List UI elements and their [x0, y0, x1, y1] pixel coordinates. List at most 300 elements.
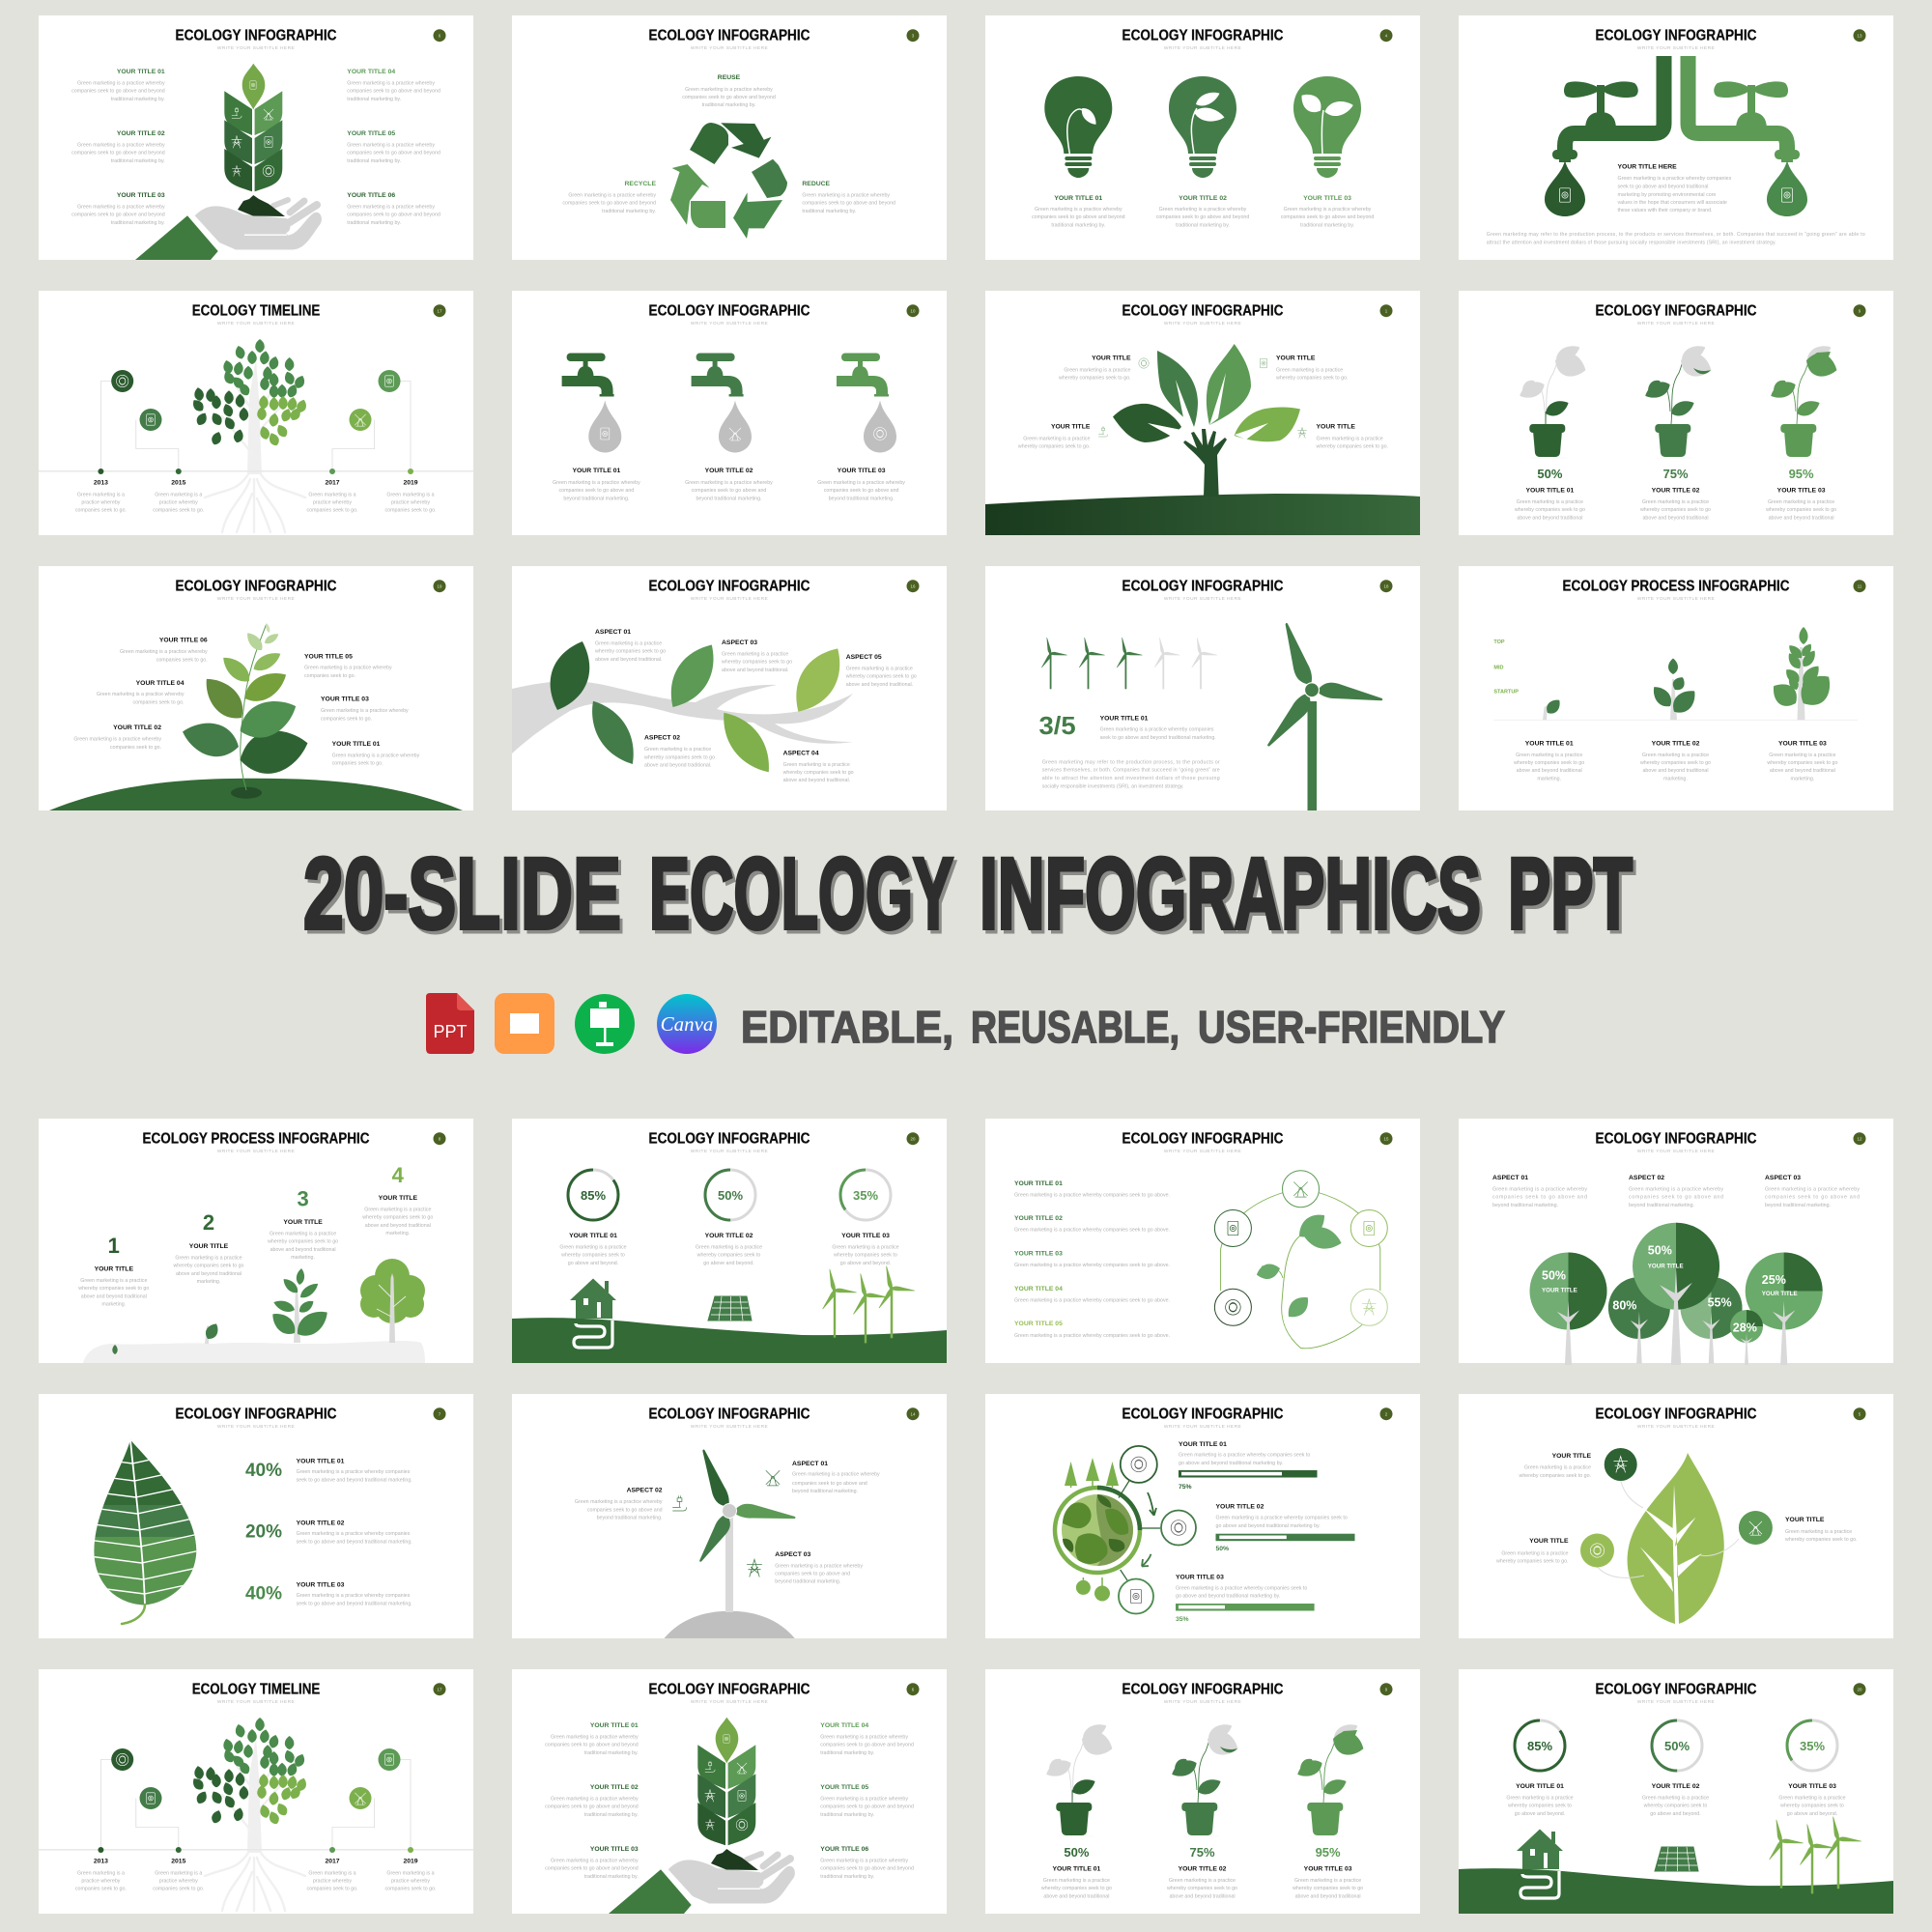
text block: recycle: traditional marketing by.	[602, 209, 656, 214]
text block: plant stats: whereby companies seek to go	[1515, 507, 1585, 513]
text block: aspects: above and beyond traditional.	[722, 668, 789, 673]
text block: aspects: companies seek to go above and	[587, 1507, 663, 1513]
page badge	[1853, 29, 1866, 42]
text block: center: marketing by promoting environmental core	[1617, 192, 1716, 198]
title: ECOLOGY TIMELINE	[192, 303, 320, 319]
chart labels	[1542, 1244, 1798, 1335]
icon: Keynote	[575, 994, 635, 1054]
text block: left titles	[71, 69, 165, 226]
illustration: big leaf with connectors	[1580, 1448, 1773, 1625]
text block: right titles: Green marketing is a practice whereby	[321, 708, 409, 714]
text block: callouts left: whereby companies seek to go.	[1059, 376, 1130, 382]
text block: aspects	[595, 629, 917, 783]
text block: steps: marketing.	[197, 1279, 220, 1285]
text block: aspects: Green marketing is a practice	[595, 640, 662, 646]
title: ECOLOGY INFOGRAPHIC	[1596, 1406, 1756, 1422]
text block: steps: YOUR TITLE	[189, 1243, 229, 1250]
text block: plant stats	[1041, 1845, 1363, 1899]
text block: gauges: YOUR TITLE 01	[569, 1233, 617, 1239]
text block: bulb captions: traditional marketing by.	[1051, 222, 1105, 228]
stats and captions: 40%	[245, 1584, 282, 1605]
subtitle: WRITE YOUR SUBTITLE HERE	[1637, 596, 1715, 602]
page badge	[433, 1683, 446, 1695]
text block: aspects: Green marketing is a practice	[644, 747, 711, 753]
text block: aspects: ASPECT 04	[783, 750, 819, 756]
text block: timeline years: Green marketing is a	[308, 492, 356, 497]
text block: plant stats: Green marketing is a practice	[1043, 1878, 1110, 1884]
text block: right titles: Green marketing is a practice whereby	[820, 1734, 908, 1740]
text block: plant stats: 75%	[1189, 1845, 1215, 1860]
icon: bulb 1	[1044, 76, 1112, 178]
text block: title list: YOUR TITLE 04	[1014, 1286, 1063, 1293]
text block: left titles: Green marketing is a practice whereby	[97, 692, 185, 697]
illustration: three potted plants	[1517, 342, 1840, 458]
main heading with shadow: ECOLOGY	[652, 840, 956, 954]
text block: stage captions: whereby companies seek to go	[1514, 760, 1584, 766]
text block: left titles: Green marketing is a practice whereby	[120, 649, 208, 655]
page badge: 6	[439, 33, 441, 38]
text block: right titles: companies seek to go above and beyond	[820, 1804, 914, 1810]
text block: callouts: whereby companies seek to go.	[1519, 1473, 1591, 1479]
text block: aspects: ASPECT 02	[1629, 1175, 1664, 1181]
text block: left titles: Green marketing is a practice whereby	[73, 736, 161, 742]
text block: left titles: YOUR TITLE 01	[117, 69, 165, 75]
page badge: 6	[912, 1687, 915, 1691]
text block: aspects: above and beyond traditional.	[846, 682, 913, 688]
text block: plant stats: whereby companies seek to go	[1640, 507, 1711, 513]
text block: plant stats	[1515, 467, 1836, 521]
subtitle: WRITE YOUR SUBTITLE HERE	[1637, 321, 1715, 327]
text block: left titles: traditional marketing by.	[584, 1812, 639, 1818]
text block: gauges: Green marketing is a practice	[832, 1244, 899, 1250]
text block: gauges: YOUR TITLE 02	[705, 1233, 753, 1239]
text block: right titles: YOUR TITLE 01	[332, 741, 381, 748]
text block: bulb captions: companies seek to go above and beyond	[1156, 214, 1249, 220]
illustration: seed, sprout, young tree, tree	[112, 1259, 425, 1354]
text block: bulb captions: YOUR TITLE 02	[1179, 195, 1227, 202]
illustration: tree timeline with icons	[39, 339, 473, 532]
progress item 1: 75%	[1179, 1484, 1192, 1491]
progress item 2: 50%	[1215, 1546, 1229, 1552]
text block: callouts left	[1018, 355, 1131, 450]
tagline	[741, 1002, 1505, 1052]
page badge	[433, 1407, 446, 1420]
text block: plant stats: above and beyond traditional	[1517, 515, 1582, 521]
text block: left titles: traditional marketing by.	[111, 158, 165, 164]
text block: plant stats: above and beyond traditional	[1295, 1893, 1361, 1899]
icon: bulb 2	[1169, 76, 1236, 178]
text block: timeline years: 2019	[403, 480, 418, 487]
text block: timeline years: companies seek to go.	[153, 1887, 204, 1892]
text block: callouts right: whereby companies seek to go.	[1316, 444, 1388, 450]
text block: timeline years: practice whereby	[313, 499, 352, 505]
stats and captions: YOUR TITLE 02	[297, 1520, 345, 1526]
page badge: 7	[439, 1411, 441, 1416]
panel: timeline, slide 17	[39, 291, 473, 535]
text block: stage captions: YOUR TITLE 01	[1525, 740, 1574, 747]
subtitle: WRITE YOUR SUBTITLE HERE	[217, 45, 295, 51]
text block: aspects: ASPECT 02	[644, 735, 680, 742]
text block: timeline years: practice whereby	[81, 499, 121, 505]
subtitle: WRITE YOUR SUBTITLE HERE	[691, 1424, 768, 1430]
text block: plant stats: 75%	[1662, 467, 1689, 481]
subtitle: WRITE YOUR SUBTITLE HERE	[1164, 596, 1241, 602]
text block: right titles: Green marketing is a practice whereby	[332, 753, 420, 758]
page badge: 14	[911, 1411, 916, 1416]
text block: gauges: Green marketing is a practice	[1506, 1795, 1574, 1801]
title: ECOLOGY PROCESS INFOGRAPHIC	[1563, 578, 1789, 595]
progress item 2	[1215, 1503, 1354, 1552]
text block: stage captions: whereby companies seek to go	[1767, 760, 1837, 766]
text block: gauges: whereby companies seek to	[1780, 1803, 1844, 1808]
title: ECOLOGY INFOGRAPHIC	[1596, 1130, 1756, 1148]
text block: bottom paragraph: attract the attention and investment dollars of those pursuing socially responsible investments (SRI), an investment strategy.	[1487, 241, 1776, 246]
text block: callouts: YOUR TITLE	[1529, 1538, 1569, 1545]
text block: aspects: beyond traditional marketing.	[1492, 1203, 1558, 1208]
icon: drop 1	[588, 400, 621, 452]
text block: left titles: companies seek to go above and beyond	[71, 213, 165, 218]
text block: left titles: Green marketing is a practice whereby	[551, 1858, 639, 1863]
text block: timeline years: Green marketing is a	[155, 1870, 202, 1876]
text block: steps: Green marketing is a practice	[270, 1232, 336, 1237]
text block: center: Green marketing is a practice whereby companies	[1617, 176, 1732, 182]
text block: gauges: whereby companies seek to	[1508, 1803, 1572, 1808]
text block: right titles: Green marketing is a practice whereby	[820, 1796, 908, 1802]
text block: gauges: 35%	[853, 1188, 878, 1203]
title: ECOLOGY INFOGRAPHIC	[649, 1406, 810, 1422]
text block: left titles: Green marketing is a practice whereby	[551, 1734, 639, 1740]
title: ECOLOGY INFOGRAPHIC	[1596, 27, 1756, 44]
text block: reuse	[682, 74, 776, 108]
text block: timeline years: 2019	[403, 1859, 418, 1865]
panel: wind turbines 3/5, slide 18	[985, 566, 1420, 810]
chart labels: 80%	[1612, 1298, 1636, 1312]
text block: right titles: YOUR TITLE 04	[820, 1722, 868, 1729]
text block: callouts: Green marketing is a practice	[1501, 1551, 1569, 1557]
panel: potted plants repeat, slide 9	[985, 1669, 1420, 1914]
text block: plant stats: above and beyond traditional	[1169, 1893, 1236, 1899]
text block: gauges	[1506, 1739, 1846, 1817]
text block: left titles: companies seek to go above and beyond	[545, 1743, 639, 1748]
text block: tap captions: companies seek to go above and	[559, 488, 634, 494]
page badge: 17	[438, 1687, 442, 1691]
text block: aspects	[575, 1461, 880, 1585]
page badge	[906, 304, 920, 317]
text block: title list: YOUR TITLE 05	[1014, 1321, 1063, 1327]
text block: plant stats: YOUR TITLE 03	[1777, 488, 1826, 495]
stats and captions: 20%	[245, 1522, 282, 1543]
text block: left titles: companies seek to go.	[156, 657, 208, 663]
panel: big leaf callouts, slide 5	[1459, 1394, 1893, 1638]
text block: gauges: whereby companies seek to	[561, 1252, 625, 1258]
text block: plant stats: whereby companies seek to go	[1293, 1886, 1363, 1891]
title: ECOLOGY INFOGRAPHIC	[1122, 578, 1283, 595]
text block: stage captions: YOUR TITLE 03	[1778, 740, 1827, 747]
text block: gauges: go above and beyond.	[1787, 1811, 1837, 1817]
text block: gauges: whereby companies seek to	[834, 1252, 897, 1258]
subtitle: WRITE YOUR SUBTITLE HERE	[691, 45, 768, 51]
text block: reuse: REUSE	[718, 74, 741, 81]
text block: recycle: RECYCLE	[625, 181, 656, 187]
progress item 1	[1179, 1441, 1318, 1491]
text block: reduce: REDUCE	[802, 181, 831, 187]
text block: timeline years: practice whereby	[391, 1878, 430, 1884]
illustration: leaf cycle diagram	[1214, 1171, 1387, 1349]
text block: right titles: companies seek to go above and beyond	[347, 213, 440, 218]
page badge: 17	[438, 308, 442, 313]
page badge: 1	[1385, 308, 1388, 313]
text block: timeline years: companies seek to go.	[153, 508, 204, 514]
subtitle: WRITE YOUR SUBTITLE HERE	[217, 321, 295, 327]
subtitle: WRITE YOUR SUBTITLE HERE	[691, 596, 768, 602]
chart labels: 55%	[1708, 1296, 1732, 1310]
page badge	[1379, 1683, 1393, 1695]
icon: tap 1	[562, 354, 614, 396]
illustration: ground	[985, 494, 1420, 535]
text block: plant stats: YOUR TITLE 03	[1304, 1866, 1352, 1873]
illustration: plant growing from hand	[135, 64, 322, 260]
text block: paragraph: able to attract the attention and investment dollars of those pursuing	[1042, 776, 1220, 781]
text block: plant stats: Green marketing is a practice	[1517, 499, 1583, 505]
text block: stage captions: Green marketing is a practice	[1516, 753, 1582, 758]
text block: timeline years: 2015	[171, 480, 186, 487]
text block: bulb captions: YOUR TITLE 03	[1303, 195, 1351, 202]
progress item 1: YOUR TITLE 01	[1179, 1441, 1227, 1448]
text block: right titles: companies seek to go above and beyond	[820, 1743, 914, 1748]
text block: center: these values with their company or brand.	[1617, 208, 1713, 213]
subtitle: WRITE YOUR SUBTITLE HERE	[691, 1699, 768, 1705]
text block: title list: YOUR TITLE 02	[1014, 1215, 1063, 1222]
illustration: three potted plants	[1043, 1720, 1367, 1836]
text block: gauges: go above and beyond.	[703, 1261, 754, 1266]
page badge: 5	[1859, 1411, 1861, 1416]
title: ECOLOGY INFOGRAPHIC	[649, 578, 810, 595]
stats and captions	[245, 1458, 412, 1607]
chart labels: YOUR TITLE	[1762, 1291, 1798, 1297]
text block: bulb captions: Green marketing is a practice whereby	[1159, 207, 1247, 213]
illustration: globe with trees and linked icons	[1055, 1446, 1196, 1613]
text block: timeline years	[75, 1859, 437, 1892]
text block: right titles: companies seek to go above and beyond	[820, 1866, 914, 1872]
text block: left titles: companies seek to go above and beyond	[71, 89, 165, 95]
text block: bulb captions: companies seek to go above and beyond	[1032, 214, 1125, 220]
text block: left titles: YOUR TITLE 03	[117, 192, 165, 199]
text block: right titles	[304, 653, 420, 767]
text block: plant stats: whereby companies seek to go	[1041, 1886, 1112, 1891]
text block: aspects: companies seek to go above and	[775, 1572, 850, 1577]
text block: plant stats: YOUR TITLE 02	[1179, 1866, 1227, 1873]
text block: left titles: YOUR TITLE 04	[136, 680, 185, 687]
text block: timeline years: 2013	[94, 480, 108, 487]
text block: bulb captions: YOUR TITLE 01	[1054, 195, 1102, 202]
text block: tap captions: beyond traditional marketing.	[563, 496, 629, 501]
illustration: wind turbine on hill	[665, 1447, 797, 1638]
text block: callouts: Green marketing is a practice	[1785, 1529, 1852, 1535]
illustration: plant growing from hand	[609, 1718, 795, 1914]
text block: left titles: traditional marketing by.	[584, 1750, 639, 1756]
panel: turbine aspects, slide 14	[512, 1394, 947, 1638]
text block: gauges: YOUR TITLE 03	[841, 1233, 890, 1239]
title: ECOLOGY INFOGRAPHIC	[649, 303, 810, 319]
progress item 3	[1176, 1575, 1315, 1623]
progress item 1: go above and beyond traditional marketing by.	[1179, 1461, 1283, 1466]
text block: left titles: Green marketing is a practice whereby	[77, 80, 165, 86]
stats and captions: Green marketing is a practice whereby companies	[297, 1469, 411, 1475]
text block: steps: above and beyond traditional	[176, 1271, 242, 1277]
text block: aspects: companies seek to go above and	[792, 1481, 867, 1487]
text block: paragraph: services themselves, or both. Companies that succeed in “going green” are	[1042, 768, 1220, 774]
tagline: USER-FRIENDLY	[1198, 1002, 1505, 1052]
stats and captions: seek to go above and beyond traditional marketing.	[297, 1602, 412, 1607]
page badge: 3	[912, 33, 915, 38]
text block: aspects: above and beyond traditional.	[595, 657, 663, 663]
text block: gauges: 50%	[1664, 1739, 1690, 1753]
text block: callouts left: YOUR TITLE	[1051, 423, 1091, 431]
text block: plant stats: Green marketing is a practice	[1294, 1878, 1361, 1884]
text block: callouts	[1496, 1453, 1857, 1565]
text block: bottom paragraph: Green marketing may refer to the production process, to the products or services themselves, or both. Companies that succeed in “going green” are able to	[1487, 232, 1865, 238]
text block: timeline years: 2017	[325, 1859, 340, 1865]
text block: right titles	[347, 69, 440, 226]
text block: gauges: YOUR TITLE 02	[1652, 1783, 1700, 1790]
text block: recycle: Green marketing is a practice whereby	[568, 193, 656, 199]
text block: right titles: traditional marketing by.	[820, 1874, 874, 1880]
text block: stage captions: whereby companies seek to go	[1640, 760, 1711, 766]
text block: right titles: YOUR TITLE 04	[347, 69, 395, 75]
text block: gauges: Green marketing is a practice	[559, 1244, 627, 1250]
text block: right titles: YOUR TITLE 05	[304, 653, 353, 660]
main heading with shadow: PPT	[1508, 838, 1633, 951]
title: ECOLOGY INFOGRAPHIC	[1122, 1406, 1283, 1422]
text block: right titles: traditional marketing by.	[820, 1750, 874, 1756]
text block: stage captions: above and beyond traditional	[1770, 768, 1835, 774]
text block: plant stats: Green marketing is a practice	[1768, 499, 1834, 505]
text block: aspects: beyond traditional marketing.	[1629, 1203, 1694, 1208]
subtitle: WRITE YOUR SUBTITLE HERE	[1637, 1424, 1715, 1430]
text block: bulb captions: Green marketing is a practice whereby	[1284, 207, 1372, 213]
panel: process growth, slide 11	[1459, 566, 1893, 810]
text block: right titles: traditional marketing by.	[820, 1812, 874, 1818]
stats and captions: YOUR TITLE 01	[297, 1458, 345, 1464]
text block: aspects: above and beyond traditional.	[783, 778, 850, 783]
icon: Google Slides	[495, 993, 554, 1054]
chart: five turbine pictogram	[1040, 638, 1217, 689]
title: ECOLOGY INFOGRAPHIC	[649, 1130, 810, 1148]
text block: right titles: YOUR TITLE 03	[321, 696, 369, 703]
stats and captions: YOUR TITLE 03	[297, 1581, 345, 1588]
title: ECOLOGY INFOGRAPHIC	[1122, 27, 1283, 44]
icon: Canva	[657, 994, 717, 1054]
title: ECOLOGY INFOGRAPHIC	[176, 578, 336, 595]
main heading with shadow: INFOGRAPHICS	[980, 838, 1481, 951]
text block: tap captions: beyond traditional marketing.	[696, 496, 762, 501]
progress item 3: go above and beyond traditional marketing by.	[1176, 1594, 1280, 1600]
text block: gauges: Green marketing is a practice	[1642, 1795, 1709, 1801]
text block: plant stats: 50%	[1064, 1845, 1090, 1860]
text block: title list: YOUR TITLE 01	[1014, 1180, 1063, 1187]
text block: left titles: YOUR TITLE 02	[590, 1784, 639, 1791]
text block: aspects: companies seek to go above and	[1492, 1194, 1587, 1200]
text block: timeline years: 2017	[325, 480, 340, 487]
subtitle: WRITE YOUR SUBTITLE HERE	[217, 1699, 295, 1705]
text block: aspects: ASPECT 03	[1765, 1175, 1801, 1181]
text block: stage captions: Green marketing is a practice	[1769, 753, 1836, 758]
text block: timeline years: 2013	[94, 1859, 108, 1865]
text block: timeline years: companies seek to go.	[384, 508, 437, 514]
text block: aspects: Green marketing is a practice whereby	[1492, 1186, 1587, 1192]
title: ECOLOGY INFOGRAPHIC	[1596, 1681, 1756, 1698]
icon: PowerPoint file: PPT	[433, 1022, 468, 1041]
text block: left titles: YOUR TITLE 03	[590, 1846, 639, 1853]
panel: timeline repeat, slide 17	[39, 1669, 473, 1914]
text block: callouts right: whereby companies seek to go.	[1276, 376, 1349, 382]
text block: gauges: go above and beyond.	[1650, 1811, 1701, 1817]
text block: callouts left: Green marketing is a practice	[1064, 368, 1131, 374]
text block: gauges: go above and beyond.	[568, 1261, 618, 1266]
text block: title 01: seek to go above and beyond traditional marketing.	[1100, 735, 1216, 741]
text block: steps: Green marketing is a practice	[175, 1255, 242, 1261]
text block: tap captions: companies seek to go above and	[824, 488, 899, 494]
page badge: 9	[1385, 1687, 1388, 1691]
tagline: EDITABLE,	[741, 1002, 953, 1052]
page badge	[906, 1132, 920, 1145]
text block: aspects: beyond traditional marketing.	[1765, 1203, 1831, 1208]
text block: timeline years: companies seek to go.	[75, 508, 127, 514]
text block: aspects: Green marketing is a practice whereby	[1629, 1186, 1723, 1192]
title: ECOLOGY PROCESS INFOGRAPHIC	[143, 1130, 369, 1148]
illustration: hill	[49, 779, 463, 810]
text block: aspects: whereby companies seek to go	[595, 649, 666, 655]
text block: timeline years: Green marketing is a	[386, 1870, 435, 1876]
text block: plant stats: 50%	[1537, 467, 1563, 481]
text block: gauges: Green marketing is a practice	[1778, 1795, 1846, 1801]
text block: stage captions: marketing.	[1537, 776, 1561, 781]
text block: right titles: YOUR TITLE 06	[820, 1846, 868, 1853]
text block: timeline years: companies seek to go.	[307, 1887, 357, 1892]
illustration: sprout to tree stages	[1493, 627, 1858, 720]
title: ECOLOGY INFOGRAPHIC	[649, 1681, 810, 1698]
text block: right titles: companies seek to go.	[332, 761, 384, 767]
text block: paragraph: socially responsible investments (SRI), an investment strategy.	[1042, 783, 1184, 789]
text block: timeline years: Green marketing is a	[308, 1870, 356, 1876]
text block: callouts right: YOUR TITLE	[1316, 423, 1355, 431]
page badge	[906, 29, 920, 42]
subtitle: WRITE YOUR SUBTITLE HERE	[1164, 1149, 1241, 1154]
text block: right titles: companies seek to go.	[304, 673, 355, 679]
text block: reduce: Green marketing is a practice whereby	[802, 193, 890, 199]
text block: aspects: Green marketing is a practice	[722, 651, 788, 657]
text block: left titles: Green marketing is a practice whereby	[551, 1796, 639, 1802]
text block: aspects: companies seek to go above and	[1629, 1194, 1723, 1200]
text block: right titles: YOUR TITLE 05	[820, 1784, 868, 1791]
text block: timeline years: Green marketing is a	[77, 1870, 125, 1876]
text block: callouts right: Green marketing is a practice	[1316, 437, 1383, 442]
icon: tap 2 and drop	[692, 354, 752, 452]
icon: left tap and drop	[1545, 56, 1663, 216]
text block: gauges: go above and beyond.	[840, 1261, 891, 1266]
text block: aspects: Green marketing is a practice whereby	[1765, 1186, 1860, 1192]
text block: title list: Green marketing is a practice whereby companies seek to go above.	[1014, 1333, 1170, 1339]
icon: right tap and drop	[1689, 56, 1807, 216]
page badge	[433, 1132, 446, 1145]
text block: right titles: Green marketing is a practice whereby	[347, 80, 435, 86]
text block: steps: marketing.	[101, 1302, 126, 1308]
title: ECOLOGY INFOGRAPHIC	[176, 1406, 336, 1422]
text block: gauges: YOUR TITLE 01	[1516, 1783, 1564, 1790]
page badge	[1853, 1407, 1866, 1420]
text block: plant stats: 95%	[1789, 467, 1814, 481]
axis labels	[1493, 639, 1519, 696]
